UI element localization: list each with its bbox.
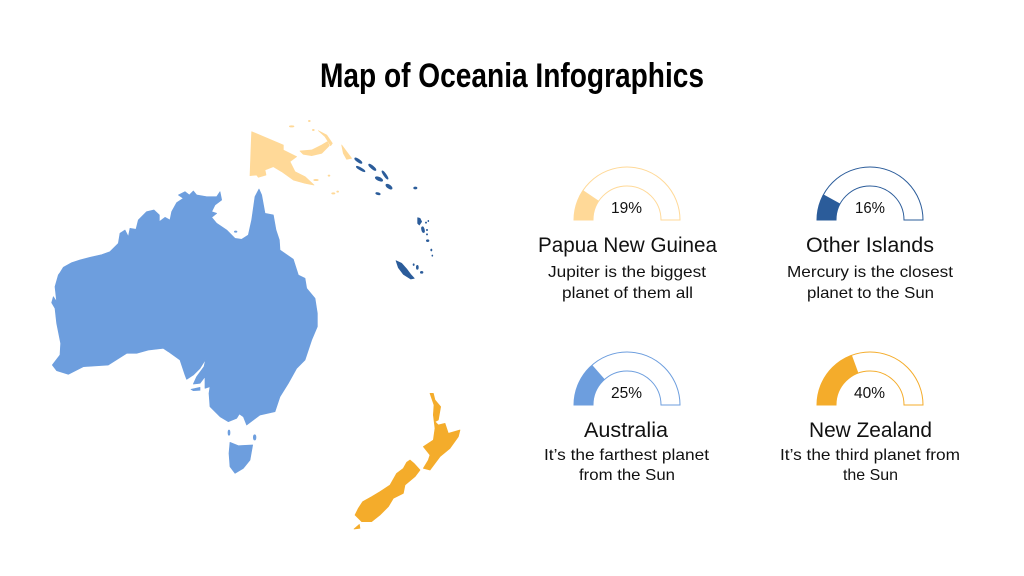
map: Papua New Guinea [250, 120, 352, 194]
description: Mercury is the closest [787, 264, 954, 281]
map: other islands [354, 157, 433, 279]
description: It’s the third planet from [780, 447, 960, 464]
description: from the Sun [579, 467, 675, 484]
gauge: 40%: 40% [854, 385, 885, 402]
panel: Other Islands [787, 167, 954, 302]
gauge: 25%: 25% [611, 385, 642, 402]
description: planet to the Sun [807, 285, 934, 302]
description: the Sun [843, 467, 898, 484]
gauge: 25% [574, 352, 680, 405]
map: New Zealand [354, 393, 460, 529]
gauge: 16% [817, 167, 923, 220]
title: Map of Oceania Infographics [320, 57, 704, 95]
panel: New Zealand [780, 352, 960, 484]
map of Oceania [52, 120, 460, 529]
description: It’s the farthest planet [544, 447, 710, 464]
heading: Other Islands [806, 234, 934, 257]
gauge: 19% [574, 167, 680, 220]
gauge: 19%: 19% [611, 200, 642, 217]
heading: Australia [584, 419, 668, 442]
description: Jupiter is the biggest [548, 264, 707, 281]
description: planet of them all [562, 285, 693, 302]
heading: Papua New Guinea [538, 234, 717, 257]
gauge: 40% [817, 352, 923, 405]
map: Australia [52, 189, 317, 473]
heading: New Zealand [809, 419, 932, 442]
panel: Australia [544, 352, 710, 484]
panel: Papua New Guinea [538, 167, 717, 302]
gauge: 16%: 16% [855, 200, 885, 217]
